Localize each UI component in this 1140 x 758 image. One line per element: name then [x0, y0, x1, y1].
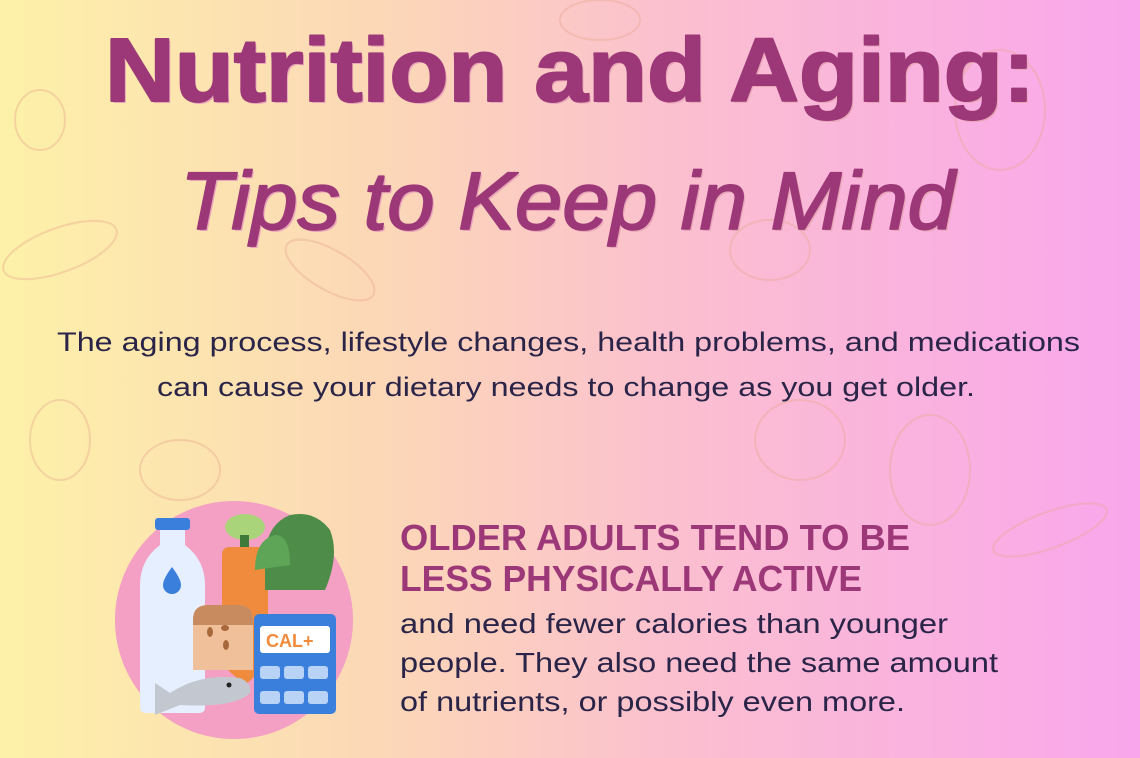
- title: Nutrition and Aging:: [105, 21, 1035, 121]
- text block: calories: [400, 608, 998, 717]
- intro text: [57, 327, 1080, 402]
- text block: calories: of nutrients, or possibly even more.: [400, 686, 905, 717]
- title: Tips to Keep in Mind: [182, 158, 959, 249]
- heading: older adults: OLDER ADULTS TEND TO BE: [400, 517, 910, 558]
- intro text: The aging process, lifestyle changes, health problems, and medications: [57, 327, 1080, 357]
- intro text: can cause your dietary needs to change as you get older.: [157, 372, 975, 402]
- heading: older adults: [400, 517, 910, 599]
- icon: food and calculator: CAL+: [266, 631, 314, 651]
- text block: calories: and need fewer calories than younger: [400, 608, 948, 639]
- icon: food and calculator: [115, 501, 353, 739]
- title: Nutrition and Aging:: [107, 23, 1037, 123]
- heading: older adults: LESS PHYSICALLY ACTIVE: [400, 558, 862, 599]
- title: [105, 21, 1037, 249]
- title: Tips to Keep in Mind: [180, 156, 957, 247]
- text block: calories: people. They also need the same amount: [400, 647, 998, 678]
